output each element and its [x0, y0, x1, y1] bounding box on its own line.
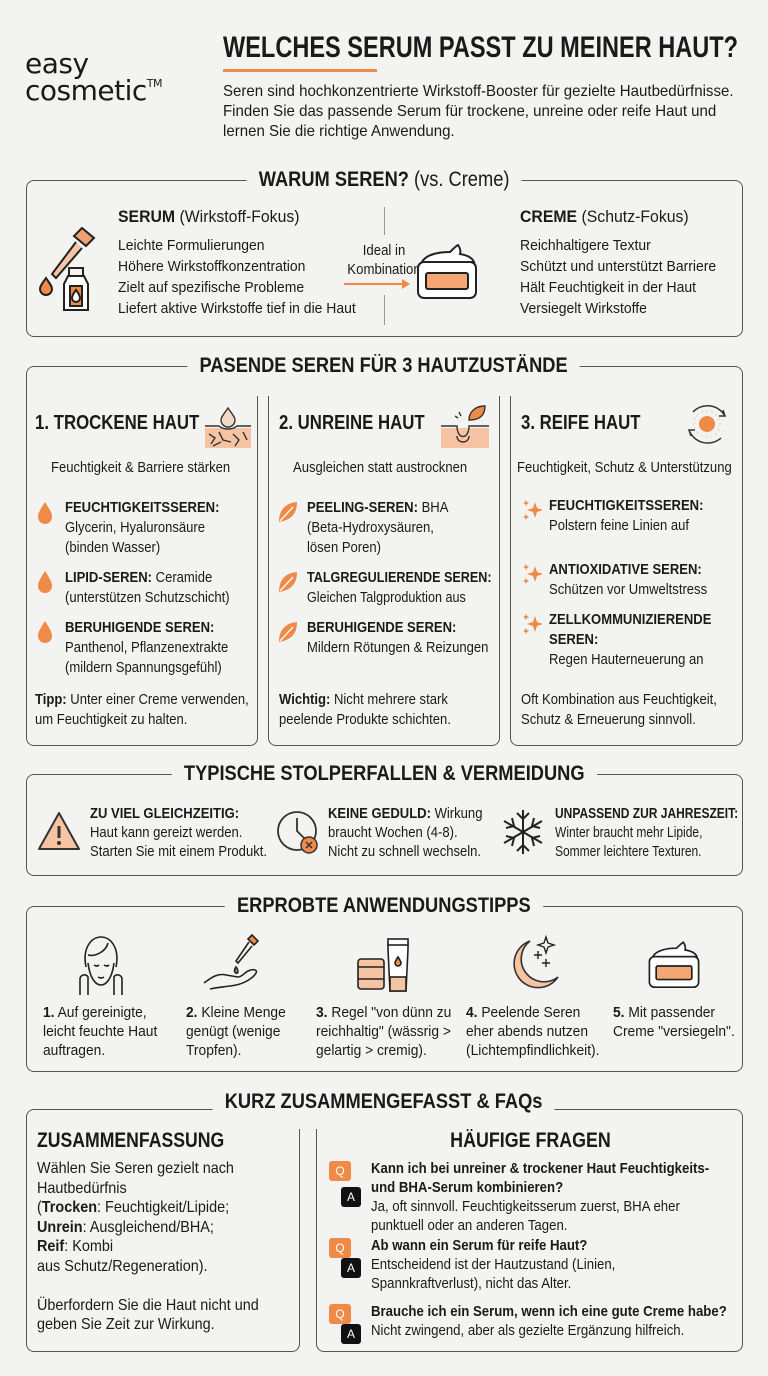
- heading: reife: 3. REIFE HAUT: [521, 412, 640, 434]
- box: zusammenfassung: [26, 1129, 300, 1352]
- icon: sparkle: [523, 564, 543, 584]
- step 1: 1. Auf gereinigte,: [43, 1004, 147, 1021]
- step 3: reichhaltig" (wässrig >: [316, 1023, 451, 1040]
- note: Oft Kombination aus Feuchtigkeit,: [521, 691, 717, 708]
- logo: easy: [25, 47, 89, 80]
- tip: Tipp: Unter einer Creme verwenden,: [35, 691, 249, 708]
- icon: creme jar: [417, 244, 477, 299]
- heading: trockene: 1. TROCKENE HAUT: [35, 412, 199, 434]
- icon: creme jar: [646, 938, 702, 994]
- callout: ideal in kombination: Kombination: [347, 261, 421, 278]
- faq 1: Kann ich bei unreiner & trockener Haut Feuchtigkeits-: [371, 1160, 709, 1177]
- text: summary: Reif: Kombi: [37, 1238, 113, 1255]
- icon: sparkle: [523, 614, 543, 634]
- faq 1: A: [347, 1190, 355, 1204]
- step 2: Tropfen).: [186, 1042, 241, 1059]
- step 1: auftragen.: [43, 1042, 105, 1059]
- icon: snowflake: [502, 808, 544, 856]
- step 2: [186, 1003, 286, 1060]
- text: zu viel: Starten Sie mit einem Produkt.: [90, 843, 267, 860]
- text: summary: [37, 1159, 259, 1334]
- tip: peelende Produkte schichten.: [279, 711, 451, 728]
- text: serum: Höhere Wirkstoffkonzentration: [118, 258, 305, 275]
- item: talg: [307, 569, 492, 606]
- text: summary: (Trocken: Feuchtigkeit/Lipide;: [37, 1199, 229, 1216]
- text: serum: SERUM (Wirkstoff-Fokus): [118, 207, 300, 226]
- text: keine geduld: KEINE GEDULD: Wirkung: [328, 805, 482, 822]
- item: antioxidativ: Schützen vor Umweltstress: [549, 581, 707, 598]
- item: peeling: [307, 499, 448, 556]
- item: peeling: PEELING-SEREN: BHA: [307, 499, 448, 516]
- heading: unreine: 2. UNREINE HAUT: [279, 412, 425, 434]
- text: jahreszeit: Sommer leichtere Texturen.: [555, 843, 702, 860]
- tip: Wichtig: Nicht mehrere stark: [279, 691, 448, 708]
- text: summary: Hautbedürfnis: [37, 1180, 127, 1196]
- item: peeling: lösen Poren): [307, 539, 381, 556]
- item: beruhigende: (mildern Spannungsgefühl): [65, 659, 222, 676]
- icon: leaf: [279, 502, 297, 522]
- faq 1: [329, 1159, 739, 1225]
- icon: leaf: [279, 622, 297, 642]
- column: unreine haut: Ausgleichen statt austrocknen: [293, 459, 467, 476]
- text: zu viel: ZU VIEL GLEICHZEITIG:: [90, 805, 239, 822]
- text: summary: aus Schutz/Regeneration).: [37, 1258, 208, 1274]
- text: keine geduld: braucht Wochen (4-8).: [328, 824, 458, 841]
- icon: drop: [38, 502, 52, 524]
- item: beruhigende: BERUHIGENDE SEREN:: [307, 619, 456, 636]
- step 1: leicht feuchte Haut: [43, 1023, 157, 1040]
- icon: face: [72, 933, 130, 997]
- panel: 3 hautzustände: [26, 366, 743, 746]
- text: serum: Leichte Formulierungen: [118, 237, 265, 254]
- faq 1: Ja, oft sinnvoll. Feuchtigkeitsserum zuerst, BHA eher: [371, 1198, 680, 1215]
- icon: drop: [38, 621, 52, 643]
- panel: anwendungstipps: [26, 906, 743, 1072]
- panel: zusammenfassung & faqs: [26, 1109, 743, 1352]
- text: summary: geben Sie Zeit zur Wirkung.: [37, 1316, 215, 1333]
- item: beruhigende: [65, 619, 228, 676]
- faq 3: Q: [335, 1307, 345, 1321]
- text: serum: Zielt auf spezifische Probleme: [118, 279, 304, 296]
- faq 3: Brauche ich ein Serum, wenn ich eine gute Creme habe?: [371, 1303, 727, 1320]
- step 4: eher abends nutzen: [466, 1023, 588, 1040]
- item: lipid-seren: [65, 569, 230, 606]
- text: jahreszeit: Winter braucht mehr Lipide,: [555, 824, 702, 841]
- text: creme: Versiegelt Wirkstoffe: [520, 300, 647, 317]
- icon: renewal cycle: [688, 405, 726, 444]
- text: jahreszeit: UNPASSEND ZUR JAHRESZEIT:: [555, 805, 738, 822]
- item: feuchtigkeitsseren: FEUCHTIGKEITSSEREN:: [65, 499, 219, 516]
- item: lipid-seren: LIPID-SEREN: Ceramide: [65, 569, 212, 586]
- panel: warum seren: [26, 180, 743, 337]
- item: antioxidativ: ANTIOXIDATIVE SEREN:: [549, 561, 702, 578]
- intro text: Finden Sie das passende Serum für trockene, unreine oder reife Haut und: [223, 103, 716, 120]
- text: keine geduld: Nicht zu schnell wechseln.: [328, 843, 481, 860]
- step 2: 2. Kleine Menge: [186, 1004, 286, 1021]
- title: WELCHES SERUM PASST ZU MEINER HAUT?: [223, 31, 738, 64]
- item: peeling: (Beta-Hydroxysäuren,: [307, 519, 434, 536]
- icon: leaf: [279, 572, 297, 592]
- callout: ideal in kombination: [347, 242, 421, 278]
- text: creme: CREME (Schutz-Fokus): [520, 207, 689, 226]
- step 3: 3. Regel "von dünn zu: [316, 1004, 451, 1021]
- item: talg: TALGREGULIERENDE SEREN:: [307, 569, 492, 586]
- step 3: gelartig > cremig).: [316, 1042, 427, 1059]
- tip: um Feuchtigkeit zu halten.: [35, 711, 187, 728]
- icon: serum dropper: [39, 226, 96, 311]
- faq 2: Ab wann ein Serum für reife Haut?: [371, 1237, 587, 1254]
- icon: sparkle: [523, 500, 543, 520]
- item: feuchtigkeitsseren: (binden Wasser): [65, 539, 160, 556]
- intro text: [223, 83, 734, 140]
- icon: hand dropper: [202, 933, 266, 993]
- intro text: Seren sind hochkonzentrierte Wirkstoff-Booster für gezielte Hautbedürfnisse.: [223, 83, 734, 100]
- faq 2: Spannkraftverlust), nicht das Alter.: [371, 1275, 571, 1292]
- icon: drop: [38, 571, 52, 593]
- note: Schutz & Erneuerung sinnvoll.: [521, 711, 696, 728]
- faq 3: A: [347, 1327, 355, 1341]
- item: zellkommunizierend: SEREN:: [549, 631, 598, 648]
- heading: zusammengefasst: KURZ ZUSAMMENGEFASST & FAQs: [225, 1090, 543, 1113]
- item: beruhigende: Panthenol, Pflanzenextrakte: [65, 639, 228, 656]
- item: antioxidativ: [549, 561, 707, 598]
- icon: products: [354, 935, 416, 997]
- column: reife haut: [510, 396, 743, 746]
- arrow: [344, 279, 410, 289]
- faq 2: A: [347, 1261, 355, 1275]
- heading: anwendungstipps: ERPROBTE ANWENDUNGSTIPPS: [237, 894, 531, 917]
- logo: cosmeticTM: [25, 74, 162, 107]
- text: zu viel: [90, 805, 267, 860]
- column: trockene haut: Feuchtigkeit & Barriere stärken: [51, 459, 230, 476]
- column: trockene haut: [26, 396, 258, 746]
- step 3: [316, 1003, 451, 1060]
- icon: dry skin: [205, 406, 251, 448]
- tip: [279, 691, 451, 728]
- faq 3: Nicht zwingend, aber als gezielte Ergänzung hilfreich.: [371, 1322, 684, 1339]
- heading: 3 hautzustände: PASENDE SEREN FÜR 3 HAUTZUSTÄNDE: [200, 354, 568, 377]
- item: zellkommunizierend: ZELLKOMMUNIZIERENDE: [549, 611, 711, 628]
- heading: warum seren: WARUM SEREN?: [259, 168, 409, 191]
- text: summary: Unrein: Ausgleichend/BHA;: [37, 1218, 214, 1236]
- text: zu viel: Haut kann gereizt werden.: [90, 824, 242, 841]
- item: feuchtigkeitsseren: [65, 499, 219, 556]
- heading: stolperfallen: TYPISCHE STOLPERFALLEN & VERMEIDUNG: [184, 762, 584, 785]
- intro text: lernen Sie die richtige Anwendung.: [223, 123, 455, 140]
- text: serum: Liefert aktive Wirkstoffe tief in die Haut: [118, 300, 356, 317]
- text: serum: [118, 207, 356, 317]
- step 2: genügt (wenige: [186, 1023, 280, 1040]
- tip: [35, 691, 249, 728]
- heading: warum seren: (vs. Creme): [414, 168, 509, 191]
- item: feuchtigkeitsseren: [549, 497, 703, 534]
- heading: warum seren: [246, 168, 522, 191]
- item: beruhigende: BERUHIGENDE SEREN:: [65, 619, 214, 636]
- step 5: Creme "versiegeln".: [613, 1023, 735, 1040]
- icon: warning: [38, 812, 80, 850]
- column: unreine haut: [268, 396, 500, 746]
- text: summary: Überfordern Sie die Haut nicht und: [37, 1296, 259, 1314]
- step 1: [43, 1003, 157, 1060]
- step 5: [613, 1003, 735, 1041]
- step 5: 5. Mit passender: [613, 1004, 715, 1021]
- item: zellkommunizierend: [549, 611, 711, 668]
- faq 2: [329, 1236, 739, 1294]
- item: lipid-seren: (unterstützen Schutzschicht): [65, 589, 230, 606]
- text: summary: Wählen Sie Seren gezielt nach: [37, 1160, 234, 1177]
- faq 3: [329, 1302, 739, 1342]
- panel: stolperfallen: [26, 774, 743, 876]
- faq 2: Q: [335, 1241, 345, 1255]
- item: talg: Gleichen Talgproduktion aus: [307, 589, 466, 606]
- item: feuchtigkeitsseren: FEUCHTIGKEITSSEREN:: [549, 497, 703, 514]
- text: creme: Schützt und unterstützt Barriere: [520, 258, 716, 275]
- step 4: 4. Peelende Seren: [466, 1004, 580, 1021]
- text: creme: [520, 207, 716, 317]
- faq 2: Entscheidend ist der Hautzustand (Linien,: [371, 1256, 615, 1273]
- item: beruhigende: Mildern Rötungen & Reizungen: [307, 639, 488, 656]
- item: feuchtigkeitsseren: Polstern feine Linien auf: [549, 517, 689, 534]
- text: jahreszeit: [555, 804, 738, 861]
- faq 1: Q: [335, 1164, 345, 1178]
- text: creme: Reichhaltigere Textur: [520, 237, 651, 254]
- note: [521, 691, 717, 728]
- heading: faqs: HÄUFIGE FRAGEN: [450, 1129, 611, 1152]
- accent line: [223, 69, 377, 72]
- callout: ideal in kombination: Ideal in: [363, 242, 405, 259]
- item: zellkommunizierend: Regen Hauterneuerung an: [549, 651, 704, 668]
- step 4: (Lichtempfindlichkeit).: [466, 1042, 599, 1059]
- box: faqs: [316, 1129, 743, 1352]
- icon: clock: [277, 811, 318, 854]
- faq 1: und BHA-Serum kombinieren?: [371, 1179, 563, 1196]
- icon: moon: [506, 933, 562, 995]
- logo: [25, 47, 162, 107]
- step 4: [466, 1003, 599, 1060]
- text: keine geduld: [328, 805, 482, 860]
- icon: pore leaf: [441, 405, 489, 448]
- text: creme: Hält Feuchtigkeit in der Haut: [520, 279, 696, 296]
- box: faqs: punktuell oder an anderen Tagen.: [371, 1217, 567, 1234]
- heading: zusammenfassung: ZUSAMMENFASSUNG: [37, 1129, 224, 1152]
- column: reife haut: Feuchtigkeit, Schutz & Unterstützung: [517, 459, 732, 476]
- item: feuchtigkeitsseren: Glycerin, Hyaluronsäure: [65, 519, 205, 536]
- item: beruhigende: [307, 619, 488, 656]
